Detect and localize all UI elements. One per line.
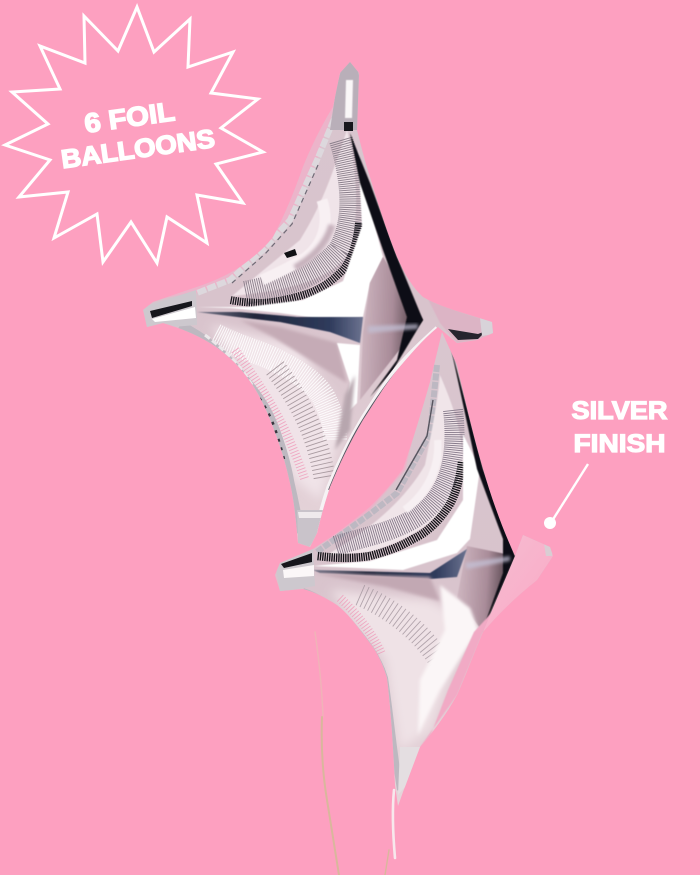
- dark horizontal streak: [313, 549, 467, 579]
- mauve right facet: [360, 257, 423, 400]
- upper panel: [325, 375, 463, 556]
- white highlight: [313, 434, 480, 570]
- top neck: [330, 62, 360, 130]
- upper silver seam: [196, 118, 332, 296]
- bottom neck: [297, 510, 323, 550]
- top neck dark detail: [344, 122, 353, 131]
- bottom neck: [398, 747, 420, 795]
- grey centre shade: [335, 375, 355, 450]
- badge text: [55, 91, 217, 174]
- left neck white stripe: [152, 307, 196, 322]
- silver shade band: [405, 440, 438, 510]
- light flare: [465, 556, 510, 569]
- balloon: lower silver star: [270, 330, 560, 810]
- pink right band: [420, 580, 540, 747]
- neck band: [298, 512, 322, 518]
- upper silver seam: [317, 365, 437, 552]
- wing tip: [544, 544, 553, 556]
- lower pale wash: [330, 590, 470, 750]
- left neck dark detail: [281, 553, 312, 568]
- callout label: SILVER: [572, 397, 668, 425]
- left neck highlight: [283, 565, 314, 578]
- grey lower ribs: [360, 595, 442, 665]
- starburst badge: [5, 7, 263, 263]
- right wing: [429, 300, 488, 342]
- white centre strip: [337, 343, 360, 417]
- callout label: FINISH: [574, 430, 666, 458]
- callout label: [572, 397, 668, 458]
- outer pink band: [322, 448, 410, 546]
- light ribs: [245, 140, 351, 293]
- dark ribs: [317, 462, 462, 558]
- black right edge: [450, 344, 515, 629]
- lower pale wash: [210, 325, 345, 500]
- left neck: [143, 290, 197, 329]
- lower left silver edge: [180, 325, 300, 533]
- badge text: 6 FOIL: [82, 96, 177, 139]
- upper outer pink band: [168, 104, 334, 298]
- lower shaded triangle: [313, 573, 440, 601]
- callout: silver finish: [544, 397, 668, 529]
- pink inner ribs: [235, 350, 305, 480]
- left neck dark stripe: [150, 301, 192, 318]
- lower rib panel: [215, 335, 335, 440]
- dark spot: [284, 249, 297, 258]
- white highlight: [197, 150, 383, 320]
- black right edge: [350, 133, 423, 397]
- top neck highlight: [345, 80, 353, 118]
- balloon strings: [315, 632, 395, 875]
- silver shade band: [295, 225, 332, 268]
- foil body: [270, 330, 560, 810]
- pointer line: [552, 464, 588, 521]
- white centre: [418, 585, 478, 735]
- grey lower ribs: [275, 368, 325, 480]
- lower left silver edge: [303, 591, 400, 790]
- mauve right facet: [457, 546, 515, 632]
- balloon: upper silver star: [143, 62, 493, 547]
- upper rib panel: [232, 130, 356, 296]
- left neck: [275, 549, 315, 592]
- pointer dot: [544, 517, 556, 529]
- light ribs: [335, 410, 454, 546]
- right pink wing: [483, 535, 553, 632]
- right wing tip: [480, 318, 494, 336]
- right wing dark detail: [448, 329, 482, 340]
- pink inner ribs: [340, 598, 382, 655]
- inner bright band: [262, 200, 325, 280]
- pale light flare: [368, 324, 418, 333]
- badge text: BALLOONS: [59, 123, 217, 174]
- dark ribs: [230, 223, 359, 303]
- starburst outline: [5, 7, 263, 263]
- dark horizontal streak: [197, 312, 363, 343]
- lower right seam: [317, 329, 438, 533]
- lower shaded triangle: [240, 320, 347, 383]
- foil body: [143, 62, 488, 547]
